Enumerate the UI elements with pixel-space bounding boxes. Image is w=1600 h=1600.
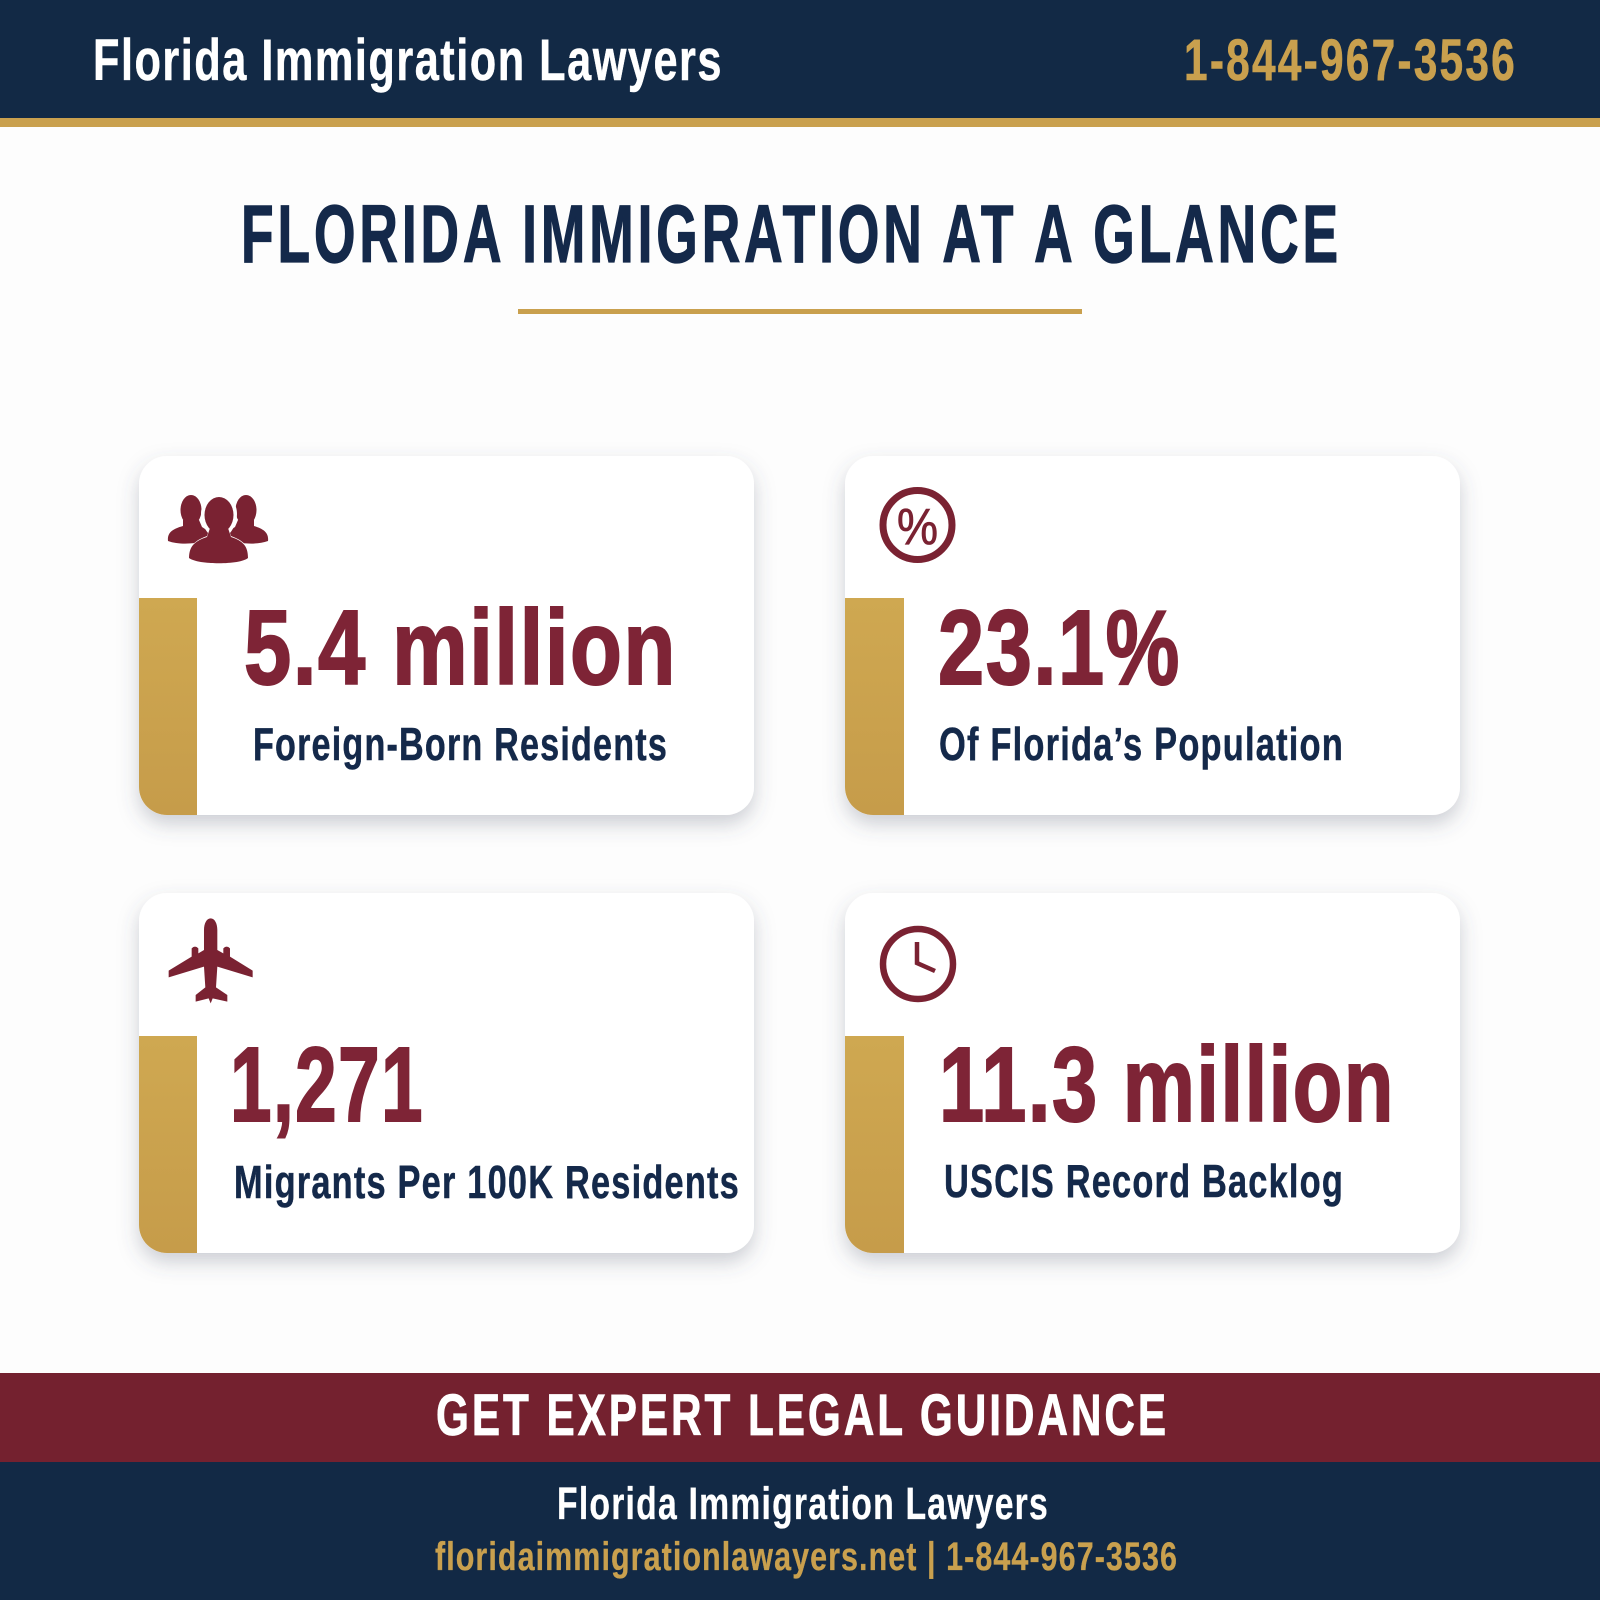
stat value: 5.4 million [244, 589, 677, 707]
gold accent bar [845, 1036, 904, 1253]
panel: migrants per 100k [139, 893, 754, 1253]
title underline [518, 309, 1082, 314]
stat value: 11.3 million [939, 1026, 1395, 1144]
icon: airplane [169, 918, 253, 1003]
panel: foreign-born residents [139, 456, 754, 815]
panel: share of population [845, 456, 1460, 815]
icon: clock [883, 929, 953, 999]
footer band [0, 1462, 1600, 1600]
stat label: Of Florida’s Population [939, 718, 1344, 770]
gold accent bar [139, 598, 197, 815]
stat label: Migrants Per 100K Residents [234, 1156, 740, 1208]
icon: percent: % [897, 498, 938, 555]
stat value: 23.1% [938, 589, 1181, 707]
footer contact line: floridaimmigrationlawayers.net | 1-844-967-3536 [435, 1535, 1178, 1579]
stat label: USCIS Record Backlog [944, 1155, 1344, 1207]
gold accent bar [139, 1036, 197, 1253]
footer firm name: Florida Immigration Lawyers [557, 1478, 1049, 1529]
icon: people [168, 494, 268, 566]
call to action heading: GET EXPERT LEGAL GUIDANCE [436, 1383, 1169, 1448]
icon: percent [883, 490, 952, 560]
stat label: Foreign-Born Residents [253, 718, 668, 770]
panel: uscis backlog [845, 893, 1460, 1253]
stat value: 1,271 [230, 1026, 424, 1144]
call to action band [0, 1373, 1600, 1462]
header firm name: Florida Immigration Lawyers [93, 28, 723, 93]
header band [0, 0, 1600, 127]
gold accent bar [845, 598, 904, 815]
